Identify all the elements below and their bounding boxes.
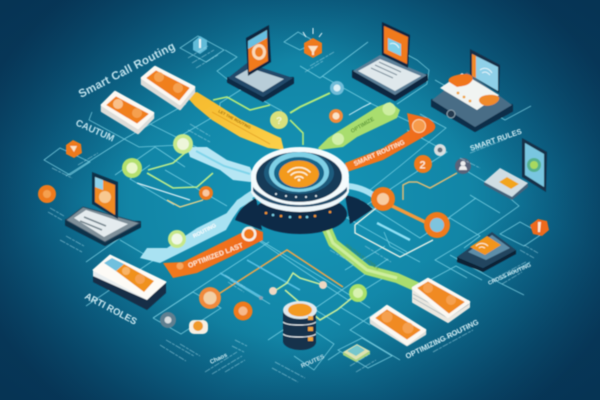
node: numbered orange circle: [414, 155, 432, 173]
node: numbered orange circle: 2: [420, 160, 426, 172]
ribbon: yellow route to hub: LET THE ROUTING: [218, 108, 252, 130]
label: routes: ROUTES: [300, 354, 326, 370]
ribbon: orange smart routing arrow: SMART ROUTING: [353, 139, 406, 168]
label: smart call routing: Smart Call Routing: [77, 41, 177, 101]
node: gray and white lower left: [160, 312, 208, 334]
ribbon: yellow route to hub: [185, 92, 284, 150]
ribbon: lower green route from hub: ROUTING TO NODES: [344, 243, 380, 271]
icon: orange badge lower left: [38, 185, 56, 203]
ribbon: orange optimized route: OPTIMIZED LAST: [187, 242, 245, 270]
card: upper left orange: [142, 67, 194, 109]
node: green circles: ?: [276, 116, 282, 127]
route: upper green lines: [213, 93, 330, 145]
route: green lines from nodes: [147, 153, 213, 188]
label: cross routing: CROSS ROUTING: [487, 262, 532, 287]
route: lower centre orange, blue and green lines: [217, 250, 352, 320]
node: gray and dark circles right: [434, 110, 471, 174]
icon: orange badge left: [66, 140, 82, 158]
node: orange circles lower centre: [199, 281, 327, 320]
label: cautum: CAUTUM: [74, 118, 116, 145]
label: arti roles: ARTI ROLES: [83, 291, 139, 328]
card: lower orange: [371, 306, 425, 345]
device: top laptop: [353, 22, 427, 100]
icon: orange badge top centre: [303, 28, 322, 58]
hub wifi icon: [288, 168, 310, 181]
thin circuit lines: [44, 32, 542, 370]
database cylinder: [283, 301, 317, 350]
route: white arrow and yellow line: [137, 183, 203, 207]
ribbon: upper light-blue route to hub: [187, 147, 256, 182]
ribbon: lower light-blue route to hub: ROUTING: [192, 223, 218, 240]
ribbon: green optimized route: [318, 102, 400, 150]
label: chaos: Chaos: [209, 352, 229, 366]
icon: blue badge top: [193, 36, 207, 54]
hub side wings: [224, 186, 378, 230]
ribbon: lower green route from hub: [320, 213, 417, 287]
node: blue and small circles upper centre: [329, 81, 371, 123]
card: lower right stacked orange: [413, 279, 469, 322]
route: orange connector and white loop: [355, 173, 457, 257]
label: optimizing routing: OPTIMIZING ROUTING: [404, 317, 480, 361]
device: left phone on base: [66, 172, 140, 245]
icon: green diamond bottom: [343, 344, 370, 362]
label: smart rules: SMART RULES: [469, 127, 523, 153]
ribbon: orange smart routing arrow: [345, 113, 435, 172]
device: lower left card: [93, 255, 166, 310]
ribbon: orange optimized route: [163, 226, 263, 278]
ribbon: lower light-blue route to hub: [140, 192, 253, 263]
central hub: [224, 147, 378, 234]
device: top phone on base: [228, 25, 293, 101]
device: lower right tablet: [457, 232, 516, 272]
small caption lines: [48, 46, 538, 382]
node: green circles: [122, 111, 367, 302]
card: left orange: [102, 92, 153, 133]
device: right router with laptop: [432, 49, 512, 131]
ribbon: green optimized route: OPTIMIZE: [350, 116, 376, 135]
icon: orange badge right: [530, 219, 549, 236]
device: right phone and tablet base: [484, 138, 547, 200]
node: orange circles right of hub: [199, 186, 450, 238]
